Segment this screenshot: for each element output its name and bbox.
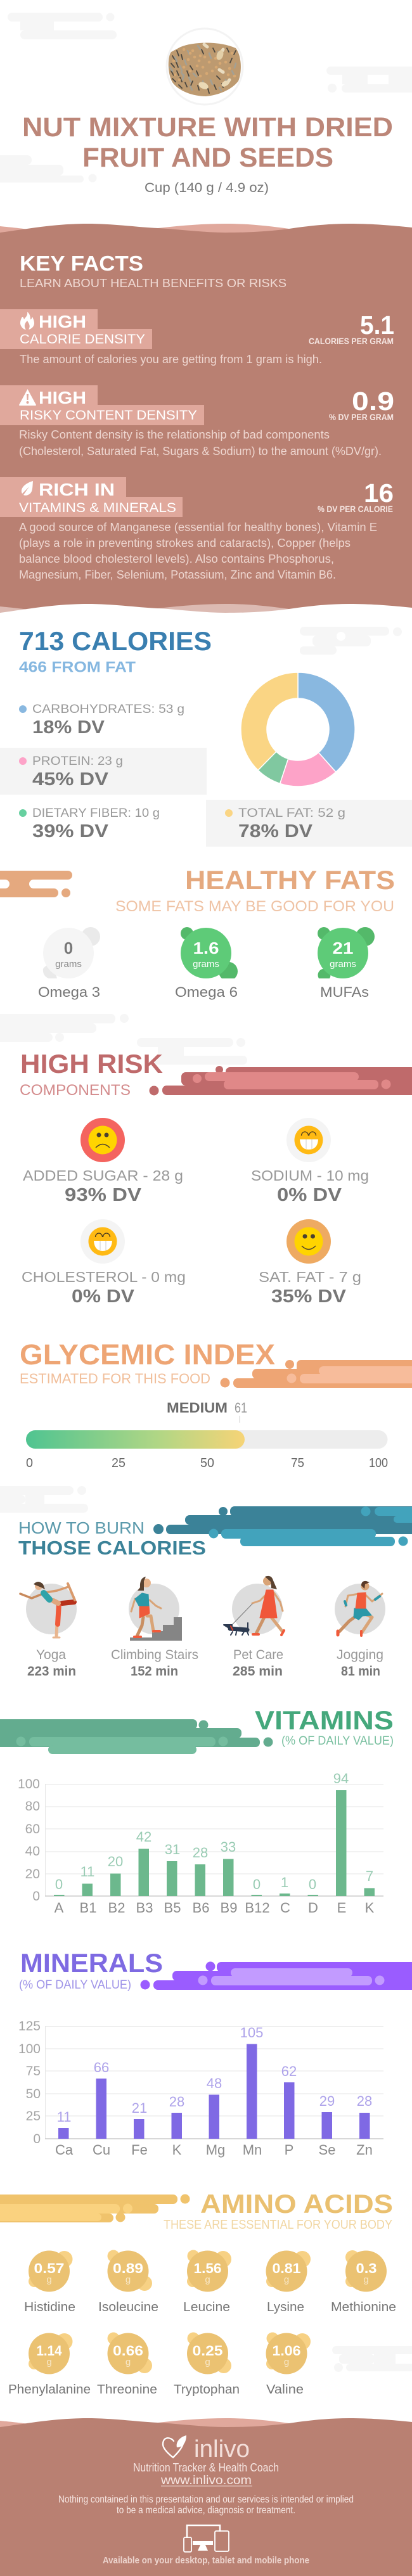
amino acid: phenylalanine: g [46, 2357, 52, 2368]
website link: www.inlivo.com [160, 2474, 252, 2487]
bar chart: minerals: 21 [132, 2100, 147, 2116]
icon: woman walking dog [224, 1576, 284, 1635]
macro: total fat: TOTAL FAT: 52 g [238, 807, 345, 820]
exercise: pet care: 285 min [233, 1664, 283, 1679]
fat: mufas: 21 [332, 939, 354, 958]
component: added sugar: 93% DV [65, 1185, 142, 1205]
amino acid: tryptophan [174, 2332, 240, 2397]
amino acid: tryptophan: Tryptophan [174, 2383, 240, 2397]
bar chart: vitamins: 0 [32, 1889, 40, 1904]
macro: dietary fiber [19, 807, 160, 842]
icon: warning triangle [19, 389, 36, 406]
banner shape [141, 1962, 412, 1990]
amino acid: valine: 1.06 [273, 2343, 300, 2359]
bar chart: minerals: 28 [357, 2093, 372, 2109]
fat: omega 6: 1.6 [193, 939, 219, 958]
bar chart: vitamins: 11 [80, 1864, 94, 1880]
bar chart: vitamins: 20 [25, 1867, 40, 1881]
banner shape [221, 1360, 412, 1388]
component: sodium: 0% DV [277, 1185, 342, 1205]
gauge: glycemic index value: 0 [26, 1456, 33, 1470]
panel: footer [0, 2418, 412, 2576]
heading: amino acids [164, 2189, 393, 2232]
icon: desktop, tablet and phone [184, 2525, 229, 2552]
banner shape [0, 871, 72, 897]
serving size: Cup (140 g / 4.9 oz) [145, 181, 269, 195]
fact: rich in vitamins and minerals: % DV PER CALORIE [318, 504, 393, 514]
fat: mufas: MUFAs [320, 984, 369, 1000]
bar chart: minerals: K [172, 2142, 182, 2158]
bar chart: minerals: 29 [319, 2093, 335, 2109]
bar chart: minerals: P [285, 2142, 293, 2158]
panel: high risk components [20, 1049, 412, 1307]
component: saturated fat [259, 1219, 361, 1307]
icon: leaf [22, 481, 33, 496]
fact: rich in vitamins and minerals: (plays a role in preventing strokes and cataracts), Copper (helps [19, 537, 351, 549]
fact: rich in vitamins and minerals: Magnesium, Fiber, Selenium, Potassium, Zinc and Vitamin B6. [19, 568, 336, 581]
bar chart: minerals: 125 [18, 2019, 41, 2034]
macro: carbohydrates: CARBOHYDRATES: 53 g [32, 703, 184, 716]
fact: rich in vitamins and minerals: VITAMINS & MINERALS [19, 501, 176, 515]
bar chart: minerals: 25 [26, 2109, 41, 2124]
bar chart: minerals: 28 [169, 2094, 184, 2110]
bar chart: vitamins: 33 [221, 1839, 236, 1855]
macro: total fat: 78% DV [238, 821, 313, 842]
component: added sugar [23, 1118, 183, 1205]
bar chart: vitamins: 1 [281, 1874, 288, 1890]
gauge: glycemic index value: 25 [112, 1456, 126, 1470]
fact: calorie density: CALORIE DENSITY [20, 332, 145, 347]
icon: stairs figure [130, 1577, 182, 1641]
gauge: glycemic index value: 50 [200, 1456, 214, 1470]
heading: calories [19, 626, 212, 676]
amino acid: threonine: Threonine [97, 2383, 157, 2397]
heading: how to burn [18, 1518, 206, 1559]
bar chart: minerals: Mg [206, 2142, 225, 2158]
component: cholesterol: CHOLESTEROL - 0 mg [22, 1269, 186, 1285]
fact: risky content density: (Cholesterol, Saturated Fat, Sugars & Sodium) to the amount (%DV/gr). [19, 445, 382, 458]
panel: amino acids [0, 2189, 396, 2397]
panel: healthy fats [0, 865, 395, 1000]
macro: total fat [206, 800, 412, 847]
heading: minerals: MINERALS [20, 1948, 163, 1978]
availability note: Available on your desktop, tablet and mobile phone [103, 2555, 309, 2566]
heading: glycemic index: ESTIMATED FOR THIS FOOD [20, 1371, 210, 1387]
bar chart: vitamins: 40 [25, 1844, 40, 1859]
bar chart: minerals: 0 [33, 2132, 41, 2146]
gauge: glycemic index value: MEDIUM [167, 1400, 228, 1416]
amino acid: isoleucine: Isoleucine [98, 2300, 158, 2314]
fat: mufas: grams [330, 959, 356, 970]
bar chart: vitamins: 28 [193, 1845, 208, 1861]
bar chart: minerals: 105 [240, 2025, 263, 2041]
bar chart: minerals: Zn [356, 2142, 373, 2158]
amino acid: leucine: g [205, 2274, 210, 2285]
fat: omega 3: 0 [64, 939, 73, 958]
fact: calorie density: CALORIES PER GRAM [309, 336, 394, 346]
heading: vitamins [255, 1705, 394, 1748]
panel: how to burn those calories [18, 1506, 412, 1679]
fact: calorie density: The amount of calories you are getting from 1 gram is high. [20, 353, 322, 366]
bar chart: minerals: 48 [207, 2075, 222, 2091]
banner shape [0, 1719, 273, 1754]
icon: sad face [80, 1118, 125, 1162]
heading: vitamins: VITAMINS [255, 1705, 394, 1735]
amino acid: isoleucine [98, 2250, 158, 2314]
exercise: jogging: 81 min [341, 1664, 380, 1679]
heading: glycemic index [20, 1338, 275, 1387]
bar chart: minerals: 11 [57, 2109, 71, 2125]
bar chart: minerals: 100 [18, 2042, 41, 2056]
bar chart: minerals [18, 2019, 383, 2158]
fact: calorie density: 5.1 [360, 311, 394, 340]
amino acid: valine [266, 2332, 311, 2397]
panel: vitamins [0, 1705, 394, 1916]
gauge: glycemic index value: 61 [235, 1400, 247, 1416]
fact: risky content density: RISKY CONTENT DENSITY [20, 408, 197, 423]
amino acid: valine: g [284, 2357, 289, 2368]
bar chart: vitamins: D [308, 1900, 318, 1916]
heading: amino acids: THESE ARE ESSENTIAL FOR YOUR BODY [164, 2218, 392, 2232]
fat: omega 3: Omega 3 [38, 984, 100, 1000]
amino acid: lysine [266, 2251, 311, 2314]
bar chart: vitamins [18, 1771, 383, 1916]
bar chart: vitamins: B5 [164, 1900, 181, 1916]
exercise: jogging: Jogging [337, 1648, 383, 1662]
disclaimer [58, 2494, 354, 2516]
bar chart: vitamins: 0 [309, 1876, 316, 1892]
exercise: yoga [20, 1582, 77, 1679]
component: cholesterol: 0% DV [72, 1286, 135, 1307]
heading: calories: 466 FROM FAT [19, 659, 136, 676]
bar chart: vitamins: B3 [136, 1900, 153, 1916]
heading: key facts [20, 252, 286, 290]
component: sodium [251, 1118, 369, 1205]
heading: healthy fats [115, 865, 395, 915]
amino acid: leucine: Leucine [183, 2300, 230, 2314]
icon: smiling face [286, 1219, 331, 1264]
amino acid: phenylalanine [8, 2333, 91, 2397]
fat: omega 3: grams [55, 959, 82, 970]
bar chart: vitamins: K [365, 1900, 375, 1916]
fat: omega 6 [175, 927, 238, 1000]
heading: high risk [20, 1049, 163, 1099]
fact: rich in vitamins and minerals: RICH IN [39, 480, 115, 499]
fact: risky content density: HIGH [39, 388, 86, 407]
fact: rich in vitamins and minerals [0, 477, 394, 581]
fat: omega 6: grams [193, 959, 219, 970]
macro: carbohydrates: 18% DV [32, 717, 105, 738]
bar chart: vitamins: B12 [245, 1900, 270, 1916]
heading: healthy fats: HEALTHY FATS [185, 865, 395, 895]
amino acid: isoleucine: g [126, 2274, 131, 2285]
title [22, 112, 393, 173]
bar chart: vitamins: 31 [165, 1842, 180, 1857]
bar chart: vitamins: 42 [136, 1829, 151, 1845]
amino acid: tryptophan: g [205, 2357, 210, 2368]
heading: glycemic index: GLYCEMIC INDEX [20, 1338, 275, 1371]
macro: protein [0, 748, 207, 795]
bar chart: vitamins: 0 [253, 1876, 261, 1892]
heading: healthy fats: SOME FATS MAY BE GOOD FOR YOU [115, 898, 394, 915]
heading: high risk: COMPONENTS [20, 1082, 131, 1099]
amino acid: methionine [331, 2250, 396, 2314]
amino acid: phenylalanine: 1.14 [37, 2343, 62, 2359]
food photo: nut and seed mixture [167, 29, 243, 105]
icon: grinning face [80, 1219, 125, 1264]
amino acid: lysine: g [284, 2274, 289, 2285]
donut chart: macronutrients [241, 672, 355, 786]
icon: flame [20, 312, 34, 330]
fact: risky content density: % DV PER GRAM [329, 412, 394, 422]
macro: dietary fiber: 39% DV [32, 821, 109, 842]
bar chart: vitamins: 94 [333, 1771, 349, 1786]
title: NUT MIXTURE WITH DRIED [22, 112, 393, 143]
bar chart: vitamins: 100 [18, 1777, 40, 1791]
bar chart: vitamins: B1 [80, 1900, 96, 1916]
exercise: jogging [335, 1581, 385, 1679]
bar chart: minerals: Mn [243, 2142, 262, 2158]
macro: dietary fiber: DIETARY FIBER: 10 g [32, 807, 160, 820]
bar chart: vitamins: B6 [193, 1900, 209, 1916]
bar chart: vitamins: C [280, 1900, 290, 1916]
amino acid: lysine: 0.81 [273, 2260, 300, 2276]
fat: omega 3 [38, 927, 100, 1000]
fat: omega 6: Omega 6 [175, 984, 238, 1000]
bar chart: minerals: Se [319, 2142, 335, 2158]
heading: minerals: (% OF DAILY VALUE) [19, 1978, 131, 1992]
bar chart: minerals: Cu [93, 2142, 110, 2158]
logo: inlivo: inlivo [194, 2436, 250, 2463]
exercise: pet care: Pet Care [233, 1648, 283, 1662]
exercise: pet care [224, 1576, 284, 1679]
tagline: Nutrition Tracker & Health Coach [133, 2461, 279, 2474]
banner shape [0, 2194, 190, 2222]
amino acid: threonine: 0.66 [113, 2343, 143, 2359]
title: FRUIT AND SEEDS [82, 143, 333, 173]
amino acid: methionine: Methionine [331, 2300, 396, 2314]
heading: minerals [19, 1948, 163, 1992]
amino acid: methionine: 0.3 [356, 2260, 377, 2276]
banner shape [150, 1066, 412, 1095]
fact: rich in vitamins and minerals: balance blood cholesterol levels). Also contains Phosphorus, [19, 553, 334, 565]
exercise: climbing stairs: 152 min [131, 1664, 178, 1679]
heading: key facts: KEY FACTS [20, 252, 143, 275]
component: cholesterol [22, 1219, 186, 1307]
amino acid: isoleucine: 0.89 [113, 2260, 143, 2276]
macro: protein: PROTEIN: 23 g [32, 755, 123, 768]
icon: grinning face [286, 1118, 331, 1162]
bar chart: vitamins: 60 [25, 1822, 40, 1836]
fact: calorie density [0, 309, 394, 366]
panel: minerals [18, 1948, 412, 2158]
banner shape [153, 1506, 412, 1546]
bar chart: vitamins: 80 [25, 1799, 40, 1814]
bar chart: vitamins: 7 [366, 1868, 373, 1884]
amino acid: tryptophan: 0.25 [193, 2343, 223, 2359]
amino acid: threonine: g [126, 2357, 131, 2368]
exercise: climbing stairs [111, 1577, 198, 1679]
bar chart: vitamins: 20 [108, 1854, 123, 1869]
amino acid: phenylalanine: Phenylalanine [8, 2383, 91, 2397]
heading: calories: 713 CALORIES [19, 626, 212, 656]
bar chart: minerals: Fe [131, 2142, 148, 2158]
bar chart: vitamins: A [55, 1900, 64, 1916]
amino acid: lysine: Lysine [267, 2300, 304, 2314]
amino acid: valine: Valine [266, 2383, 304, 2397]
logo: inlivo [163, 2435, 250, 2463]
fact: calorie density: HIGH [39, 312, 86, 331]
bar chart: minerals: 66 [94, 2060, 109, 2075]
bar chart: vitamins: E [337, 1900, 346, 1916]
amino acid: histidine: Histidine [24, 2300, 75, 2314]
amino acid: threonine [97, 2332, 157, 2397]
amino acid: histidine: g [46, 2274, 52, 2285]
panel: glycemic index [20, 1338, 412, 1470]
component: saturated fat: 35% DV [271, 1286, 347, 1307]
exercise: climbing stairs: Climbing Stairs [111, 1648, 198, 1662]
fact: risky content density: Risky Content density is the relationship of bad components [19, 428, 330, 441]
heading: how to burn: HOW TO BURN [18, 1518, 145, 1537]
macro: carbohydrates [19, 703, 184, 738]
component: saturated fat: SAT. FAT - 7 g [259, 1269, 361, 1285]
amino acid: methionine: g [363, 2274, 369, 2285]
bar chart: minerals: 50 [26, 2087, 41, 2101]
gauge: glycemic index value: 75 [291, 1456, 304, 1470]
heading: key facts: LEARN ABOUT HEALTH BENEFITS OR RISKS [20, 276, 286, 290]
amino acid: leucine [183, 2250, 231, 2314]
macro: protein: 45% DV [32, 769, 109, 790]
fact: risky content density [0, 385, 394, 458]
amino acid: histidine [24, 2251, 75, 2314]
bar chart: minerals: 75 [26, 2064, 41, 2079]
exercise: yoga: Yoga [36, 1648, 66, 1662]
bar chart: minerals: Ca [55, 2142, 74, 2158]
fat: mufas [318, 927, 375, 1000]
gauge: glycemic index value [26, 1400, 388, 1470]
exercise: yoga: 223 min [27, 1664, 76, 1679]
gauge: glycemic index value: 100 [369, 1456, 388, 1470]
bar chart: minerals: 62 [281, 2063, 297, 2079]
component: added sugar: ADDED SUGAR - 28 g [23, 1167, 183, 1184]
disclaimer: to be a medical advice, diagnosis or treatment. [117, 2505, 295, 2516]
fact: rich in vitamins and minerals: 16 [364, 478, 394, 508]
bar chart: vitamins: 0 [55, 1876, 63, 1892]
component: sodium: SODIUM - 10 mg [251, 1167, 369, 1184]
fact: risky content density: 0.9 [352, 387, 394, 416]
heading: vitamins: (% OF DAILY VALUE) [281, 1734, 394, 1748]
bar chart: vitamins: B9 [221, 1900, 237, 1916]
bar chart: vitamins: B2 [108, 1900, 125, 1916]
heading: how to burn: THOSE CALORIES [18, 1537, 206, 1559]
disclaimer: Nothing contained in this presentation and our services is intended or implied [58, 2494, 354, 2505]
amino acid: histidine: 0.57 [34, 2260, 65, 2276]
amino acid: leucine: 1.56 [194, 2260, 222, 2276]
heading: high risk: HIGH RISK [20, 1049, 163, 1079]
icon: jogger [338, 1581, 382, 1636]
panel: key facts [0, 224, 412, 624]
icon: yoga figure [20, 1582, 75, 1637]
fact: rich in vitamins and minerals: A good source of Manganese (essential for healthy bones), Vitamin E [19, 521, 377, 534]
heading: amino acids: AMINO ACIDS [200, 2189, 393, 2219]
